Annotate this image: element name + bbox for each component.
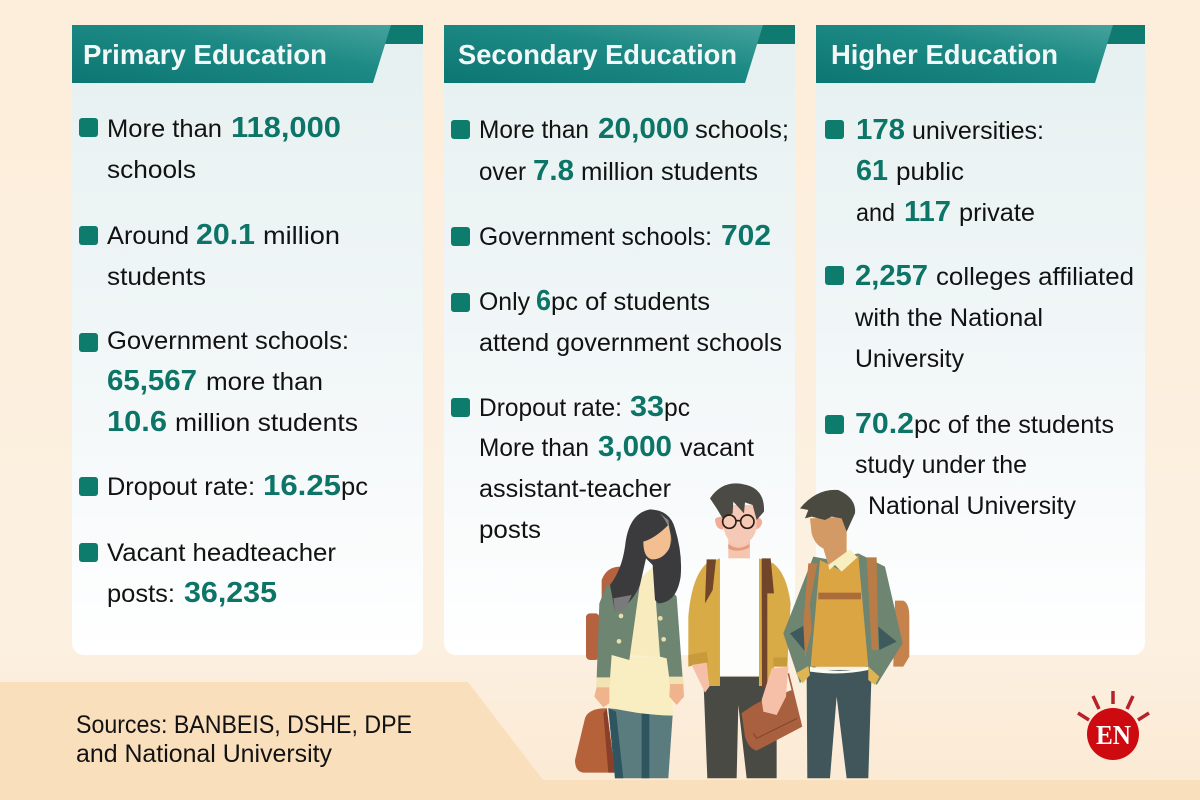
item: schools and students: schools; <box>695 116 789 144</box>
heading: higher: Higher Education <box>831 39 1058 70</box>
item: dropout and vacancies: More than <box>479 434 589 462</box>
logo: EN sun: EN <box>1096 720 1131 750</box>
item: vacant posts: Vacant headteacher <box>107 539 336 567</box>
header: primary <box>72 25 391 83</box>
item: colleges: 2,257 <box>855 260 928 292</box>
panel: higher education <box>816 25 1145 655</box>
item: national university share: pc of the students <box>914 411 1114 439</box>
item: vacant posts <box>79 539 336 609</box>
item: universities: public <box>896 158 964 186</box>
item: universities: 117 <box>904 196 951 228</box>
item: government schools: 10.6 <box>107 406 167 438</box>
item: universities: 178 <box>856 114 905 146</box>
item: share of students: Only <box>479 288 530 316</box>
item: government schools <box>451 220 771 252</box>
item: universities: private <box>959 199 1035 227</box>
item: dropout rate: Dropout rate: <box>107 473 255 501</box>
header tab: secondary <box>754 25 795 44</box>
sources note: and National University <box>76 740 332 768</box>
item: schools <box>79 112 341 184</box>
item: dropout and vacancies: 33 <box>630 391 664 423</box>
panel: primary education <box>72 25 423 655</box>
item: government schools: more than <box>206 368 323 396</box>
heading: secondary: Secondary Education <box>458 39 737 70</box>
student: boy with backpack straps <box>783 490 909 778</box>
item: schools and students: 7.8 <box>533 155 574 187</box>
item: government schools <box>79 327 358 438</box>
item: dropout and vacancies <box>451 391 754 544</box>
student: boy with glasses <box>688 483 802 778</box>
item: students: million <box>263 222 340 250</box>
item: vacant posts: posts: <box>107 580 175 608</box>
item: dropout and vacancies: Dropout rate: <box>479 394 622 422</box>
header: secondary <box>444 25 763 83</box>
item: colleges: University <box>855 345 964 373</box>
item: dropout rate: 16.25 <box>263 470 341 502</box>
student: girl with backpack <box>575 509 684 778</box>
item: dropout and vacancies: vacant <box>680 434 754 462</box>
item: government schools: million students <box>175 409 358 437</box>
header: higher <box>816 25 1113 83</box>
item: students: 20.1 <box>196 219 255 251</box>
item: dropout and vacancies: pc <box>664 394 690 422</box>
item: dropout and vacancies: 3,000 <box>598 431 672 463</box>
item: schools and students: More than <box>479 116 589 144</box>
panel: secondary education <box>444 25 795 655</box>
item: students <box>79 219 340 291</box>
item: students: students <box>107 263 206 291</box>
item: dropout rate <box>79 470 368 502</box>
item: schools and students: 20,000 <box>598 113 689 145</box>
item: colleges <box>825 260 1134 373</box>
item: government schools: Government schools: <box>479 223 712 251</box>
item: universities <box>825 114 1044 228</box>
item: dropout and vacancies: assistant-teacher <box>479 475 671 503</box>
item: national university share: National University <box>868 492 1076 520</box>
item: schools and students: over <box>479 158 526 186</box>
item: national university share <box>825 408 1114 520</box>
sources note: Sources: BANBEIS, DSHE, DPE <box>76 711 412 739</box>
item: share of students: 6 <box>536 285 551 317</box>
heading: primary: Primary Education <box>83 39 327 70</box>
item: schools and students <box>451 113 789 187</box>
item: universities: universities: <box>912 117 1044 145</box>
item: colleges: colleges affiliated <box>936 263 1134 291</box>
item: schools: 118,000 <box>231 112 341 144</box>
item: schools: More than <box>107 115 222 143</box>
item: universities: and <box>856 199 895 227</box>
item: government schools: 65,567 <box>107 365 197 397</box>
item: share of students <box>451 285 782 357</box>
item: government schools: 702 <box>721 220 771 252</box>
header tab: higher <box>1104 25 1145 44</box>
item: schools and students: million students <box>581 158 758 186</box>
item: national university share: study under the <box>855 451 1027 479</box>
item: share of students: attend government schools <box>479 329 782 357</box>
item: colleges: with the National <box>854 304 1043 332</box>
footer band <box>0 682 1200 800</box>
item: share of students: pc of students <box>551 288 710 316</box>
header tab: primary <box>382 25 423 44</box>
illustration: three students <box>575 483 909 778</box>
item: government schools: Government schools: <box>107 327 349 355</box>
item: dropout and vacancies: posts <box>479 516 541 544</box>
sources note <box>76 711 412 768</box>
item: vacant posts: 36,235 <box>184 577 277 609</box>
item: national university share: 70.2 <box>855 408 914 440</box>
item: students: Around <box>107 222 189 250</box>
logo: EN sun <box>1078 691 1149 760</box>
item: universities: 61 <box>856 155 888 187</box>
item: schools: schools <box>107 156 196 184</box>
item: dropout rate: pc <box>341 473 368 501</box>
